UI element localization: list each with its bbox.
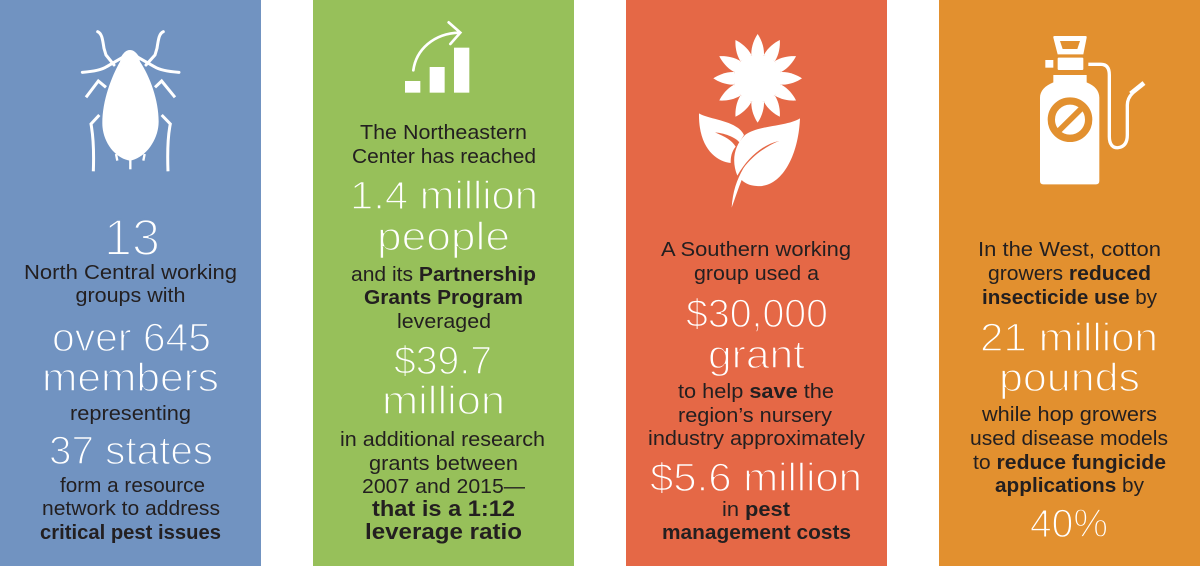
text: cotton growers xyxy=(978,239,1161,309)
text: working groups xyxy=(24,262,237,307)
text: working groups: North Central working xyxy=(24,262,237,284)
text: additional grants and ratio: grants between xyxy=(369,453,518,475)
big stat: $39.7 million xyxy=(382,339,505,423)
icon: rising bar chart with arrow xyxy=(405,22,469,93)
panel: West xyxy=(939,0,1200,566)
big stat: over 645 members xyxy=(42,316,219,400)
text: working groups: groups with xyxy=(76,285,186,307)
big stat: $39.7 million: million xyxy=(382,379,505,423)
text: Northeastern reach: The Northeastern xyxy=(360,122,527,144)
text: resource network: network to address xyxy=(42,498,220,520)
big stat: 40%: 40% xyxy=(1030,502,1108,546)
text: resource network xyxy=(40,475,221,544)
big stat: $39.7 million: $39.7 xyxy=(394,339,492,383)
big stat: over 645 members: members xyxy=(42,356,219,400)
big stat: 13: 13 xyxy=(104,209,160,266)
panel: Southern xyxy=(626,0,887,566)
text: save the nursery industry: region’s nursery xyxy=(678,405,832,427)
text: hop growers disease models: while hop growers xyxy=(981,404,1157,426)
text: hop growers disease models xyxy=(970,404,1168,497)
big stat: 1.4 million people xyxy=(350,174,538,259)
text: Northeastern reach: Center has reached xyxy=(352,146,536,168)
text: resource network: form a resource xyxy=(60,475,205,497)
text: Southern working group xyxy=(661,239,851,285)
text: Partnership Grants Program: and its Partnership xyxy=(351,264,536,286)
big stat: 21 million pounds: 21 million xyxy=(980,316,1158,360)
big stat: 37 states: 37 states xyxy=(49,429,213,473)
text: additional grants and ratio: 2007 and 2015— xyxy=(362,476,525,498)
text: pest management costs xyxy=(662,499,851,544)
text: save the nursery industry: to help save the xyxy=(678,381,834,403)
big stat: $30,000 grant xyxy=(686,292,828,377)
big stat: $5.6 million: $5.6 million xyxy=(650,456,862,500)
text: save the nursery industry xyxy=(648,381,865,450)
big stat: $30,000 grant: $30,000 xyxy=(686,292,828,336)
text: additional grants and ratio xyxy=(340,429,545,544)
big stat: 21 million pounds: pounds xyxy=(999,356,1140,400)
icon: flower with leaves xyxy=(699,34,802,208)
text: additional grants and ratio: in additional research xyxy=(340,429,545,451)
text: cotton growers: insecticide use by xyxy=(982,287,1157,309)
text: Partnership Grants Program: leveraged xyxy=(397,311,491,333)
big stat: over 645 members: over 645 xyxy=(52,316,211,360)
text: cotton growers: growers reduced xyxy=(988,263,1151,285)
text: resource network: critical pest issues xyxy=(40,522,221,544)
text: additional grants and ratio: that is a 1:12 xyxy=(372,496,515,521)
text: pest management costs: in pest xyxy=(722,499,790,521)
big stat: 21 million pounds xyxy=(980,316,1158,400)
text: additional grants and ratio: leverage ratio xyxy=(365,519,522,544)
big stat: $30,000 grant: grant xyxy=(708,333,805,377)
text: save the nursery industry: industry approximately xyxy=(648,428,865,450)
text: pest management costs: management costs xyxy=(662,522,851,544)
text: hop growers disease models: applications by xyxy=(995,475,1144,497)
text: Southern working group: A Southern working xyxy=(661,239,851,261)
text: hop growers disease models: used disease models xyxy=(970,428,1168,450)
text: Southern working group: group used a xyxy=(694,263,820,285)
icon: sprayer with prohibition sign xyxy=(1040,36,1144,184)
panel: North Central xyxy=(0,0,261,566)
text: Partnership Grants Program xyxy=(351,264,536,333)
big stat: 1.4 million people: 1.4 million xyxy=(350,174,538,218)
text: representing: representing xyxy=(70,403,191,425)
icon: aphid insect xyxy=(82,32,179,171)
text: Northeastern reach xyxy=(352,122,536,168)
panel: Northeastern xyxy=(313,0,574,566)
text: Partnership Grants Program: Grants Program xyxy=(364,287,523,309)
text: cotton growers: In the West, cotton xyxy=(978,239,1161,261)
big stat: 1.4 million people: people xyxy=(377,215,510,259)
text: hop growers disease models: to reduce fungicide xyxy=(973,452,1166,474)
